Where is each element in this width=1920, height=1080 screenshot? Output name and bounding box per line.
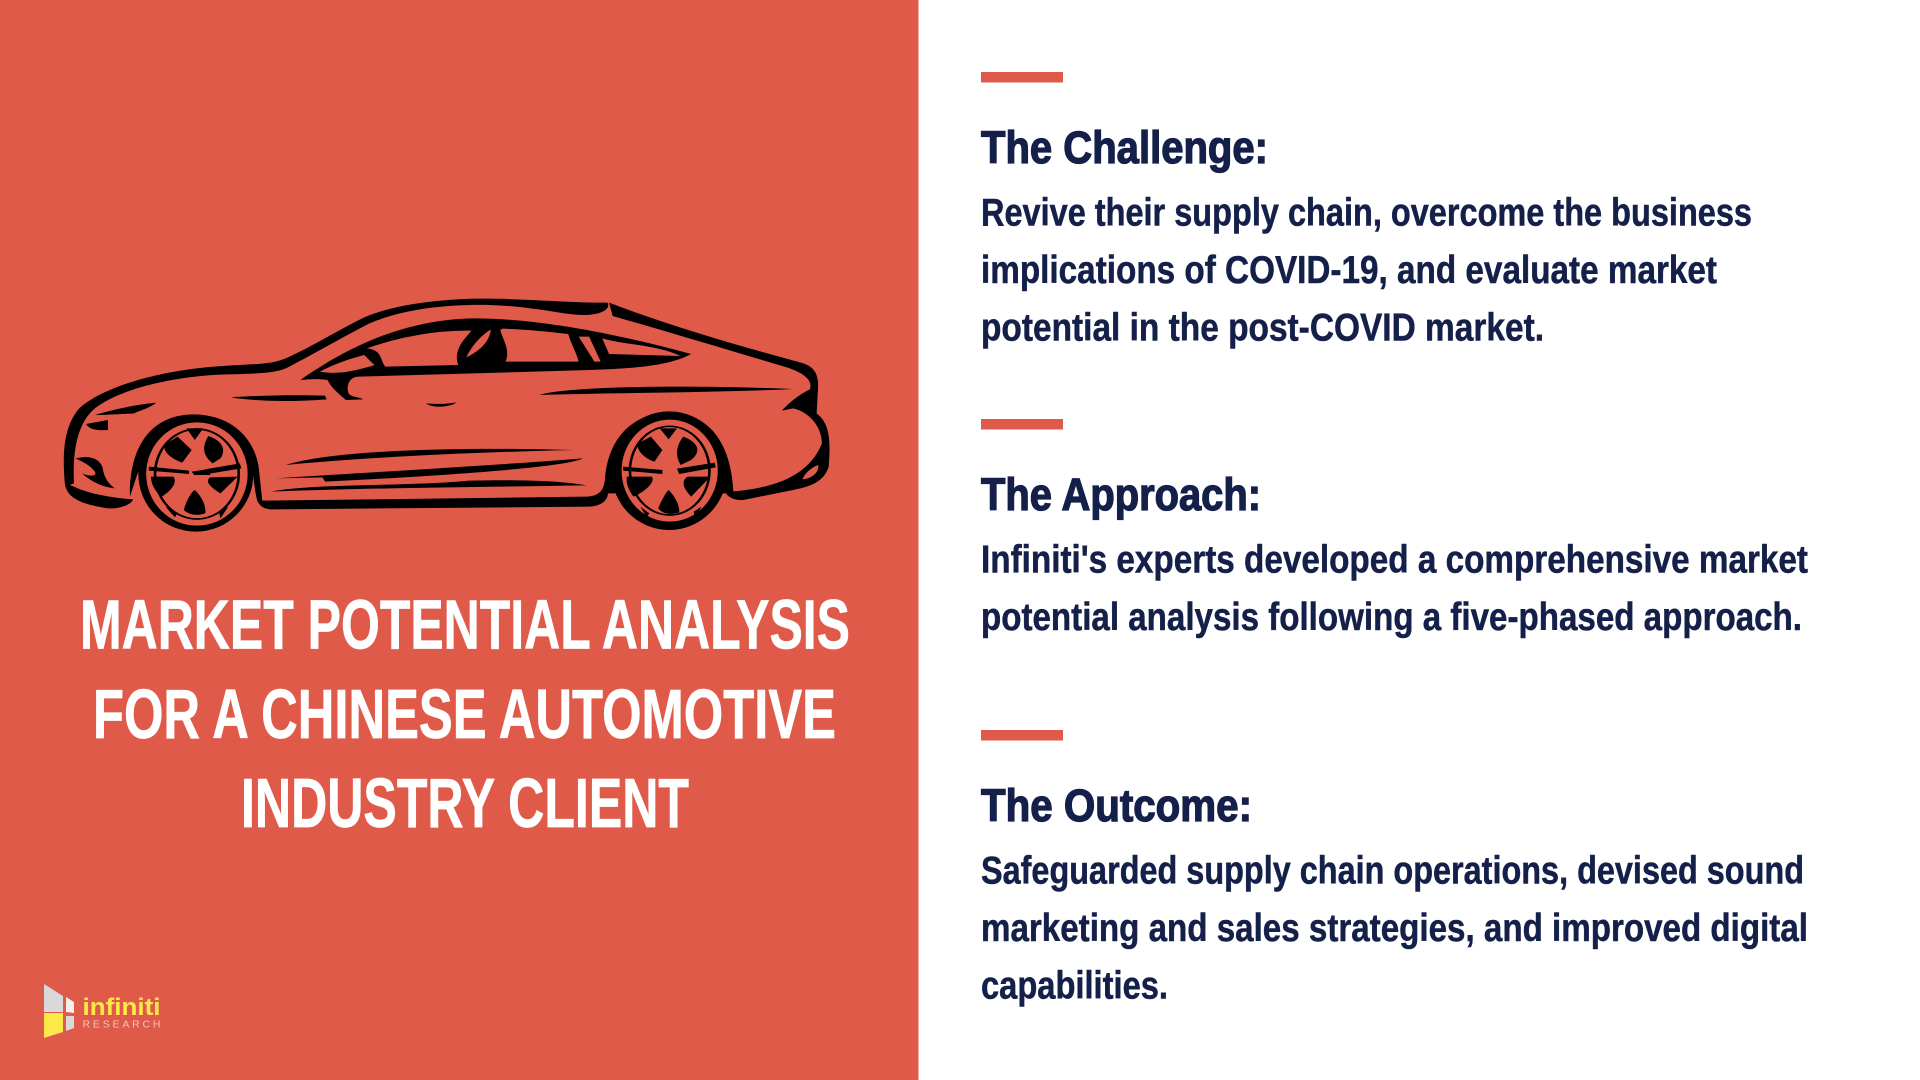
front grille	[76, 457, 115, 488]
accent bar	[981, 72, 1063, 82]
panel: left coral background	[0, 0, 918, 1080]
body text	[981, 538, 1808, 639]
body text: Infiniti's experts developed a comprehensive market	[981, 538, 1808, 582]
front wheel arch and sill	[130, 413, 733, 509]
front rim openings	[149, 428, 241, 518]
door handle line	[231, 395, 327, 401]
rear rim ring	[630, 426, 709, 515]
body text: Revive their supply chain, overcome the business	[981, 192, 1752, 234]
panel: the outcome	[981, 730, 1808, 1008]
front tyre	[138, 416, 253, 532]
body text: potential analysis following a five-phased approach.	[981, 596, 1802, 639]
rear rim openings	[623, 428, 716, 518]
tail lamp	[803, 465, 818, 479]
logo wordmark: infiniti	[82, 994, 160, 1021]
heading: The Challenge:	[981, 122, 1268, 173]
heading: The Outcome:	[981, 780, 1252, 831]
front bumper	[65, 483, 133, 508]
heading: The Approach:	[981, 469, 1261, 520]
body text: capabilities.	[981, 964, 1168, 1008]
side window frame	[300, 318, 691, 400]
title: FOR A CHINESE AUTOMOTIVE	[93, 675, 836, 753]
body text	[981, 850, 1808, 1008]
logo tagline: RESEARCH	[82, 1018, 160, 1030]
title: INDUSTRY CLIENT	[241, 764, 689, 842]
accent bar	[981, 419, 1063, 430]
title: MARKET POTENTIAL ANALYSIS	[80, 586, 850, 664]
headlight	[86, 403, 156, 430]
rocker panel strokes	[271, 449, 587, 492]
side window glass panes	[320, 329, 681, 373]
panel: the challenge	[981, 72, 1752, 350]
rear roof and trunk line	[609, 303, 830, 500]
shoulder line	[539, 387, 793, 395]
rear rim	[622, 420, 718, 522]
accent bar	[981, 730, 1063, 740]
rear tyre	[611, 411, 727, 530]
illustration: car line drawing	[64, 299, 830, 532]
logo: Infiniti Research	[44, 984, 160, 1038]
panel: the approach	[981, 419, 1808, 639]
body text: marketing and sales strategies, and improved digital	[981, 907, 1808, 950]
title	[80, 586, 850, 842]
body text: implications of COVID-19, and evaluate market	[981, 249, 1717, 292]
front rim	[146, 422, 248, 526]
front rim ring	[155, 429, 239, 519]
hood and roof line	[64, 299, 608, 487]
body text: potential in the post-COVID market.	[981, 306, 1544, 350]
door mirror mark	[426, 402, 456, 407]
body text	[981, 192, 1752, 350]
logo mark	[44, 984, 74, 1038]
